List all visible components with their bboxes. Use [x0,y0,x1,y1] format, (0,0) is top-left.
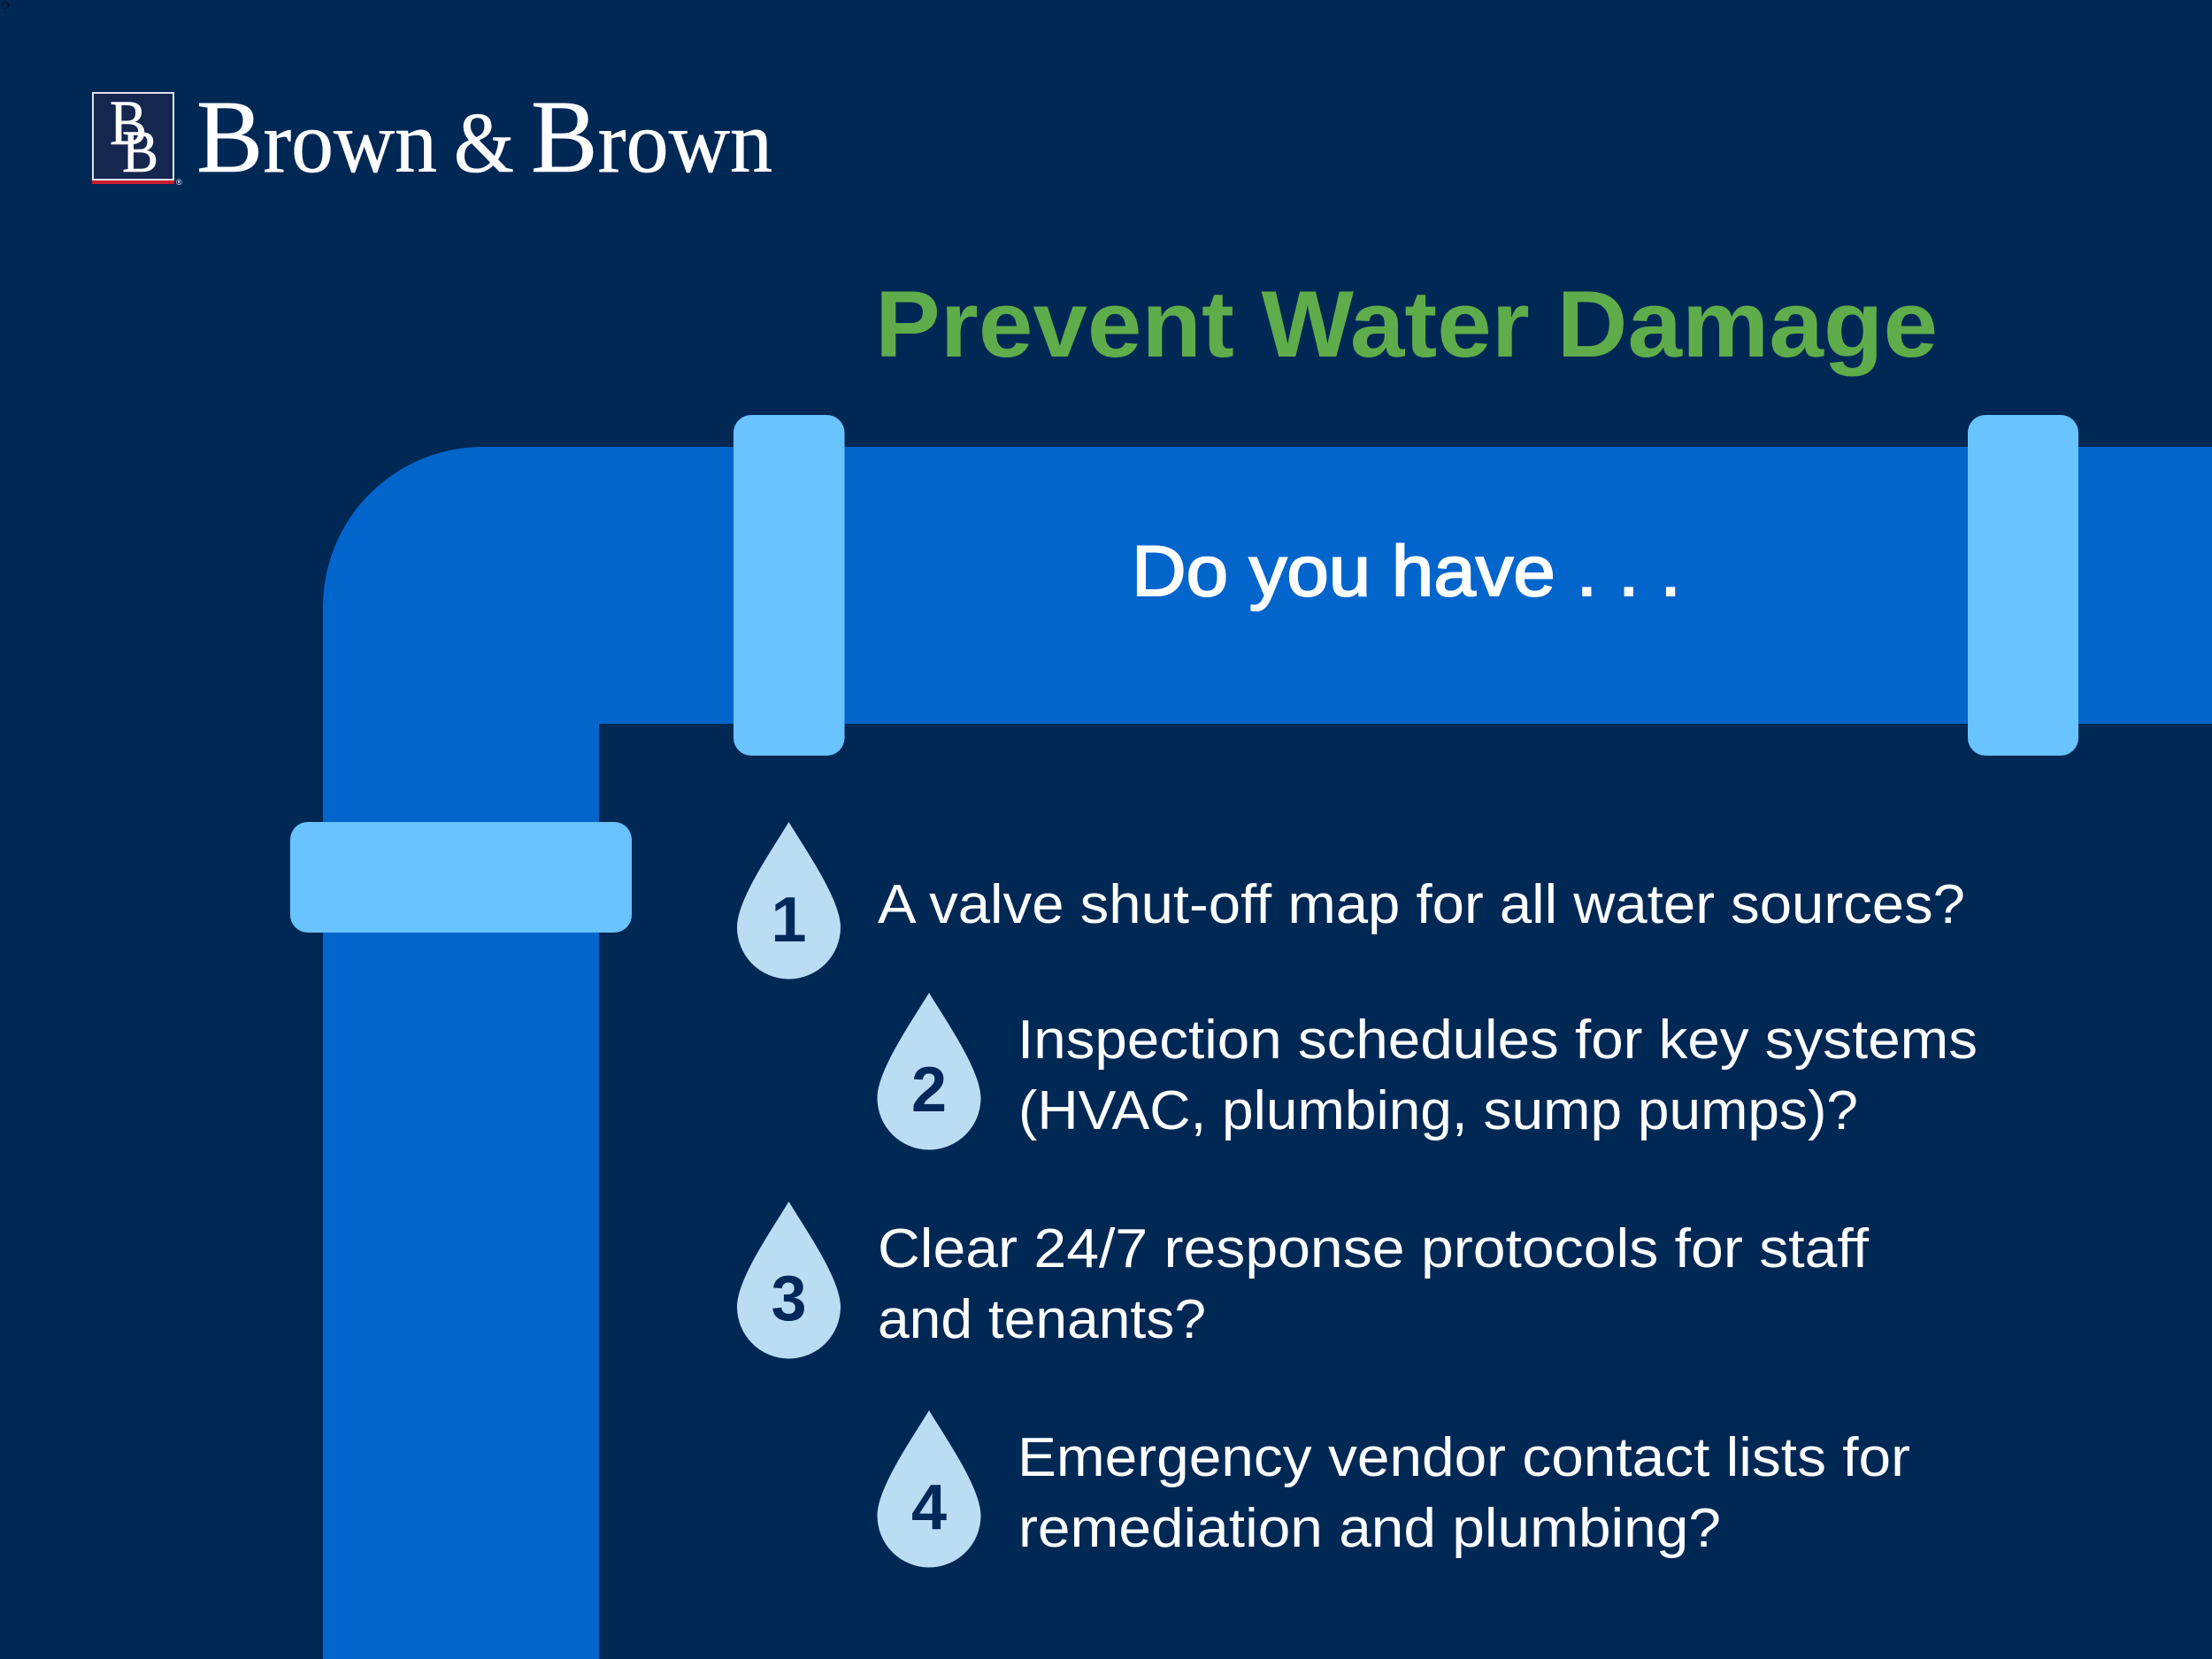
title: Prevent Water Damage [875,271,1938,377]
pipe clamp: top right [1968,415,2078,756]
logo wordmark: Brown [196,79,437,195]
logo wordmark: & [454,96,514,191]
item 4 text: remediation and plumbing? [1018,1498,1721,1559]
icon: water drop 4: 4 [911,1472,947,1543]
item 3 text: and tenants? [878,1289,1206,1350]
item 4 text [1018,1427,1910,1559]
item 2 text: (HVAC, plumbing, sump pumps)? [1018,1080,1858,1141]
item 3 text: Clear 24/7 response protocols for staff [878,1218,1870,1279]
icon: water drop 2 [878,993,980,1150]
pipe clamp: vertical section [290,822,632,933]
pipe clamp: top left [733,415,844,756]
icon: water drop 3 [737,1202,841,1359]
icon: water drop 1 [737,822,841,979]
item 3 text [878,1218,1870,1350]
logo emblem: B [110,88,147,158]
item 1 text: A valve shut-off map for all water sources? [878,874,1965,935]
icon: water drop 3: 3 [771,1263,807,1334]
icon: water drop 2: 2 [911,1055,947,1125]
logo emblem [92,88,182,187]
item 2 [878,993,1978,1150]
pipe elbow [323,447,2212,1659]
icon: water drop 4 [878,1410,980,1568]
item 2 text [1018,1010,1978,1141]
icon: water drop 1: 1 [771,885,807,956]
item 3 [737,1202,1870,1359]
pipe heading: Do you have . . . [1132,532,1681,611]
item 2 text: Inspection schedules for key systems [1018,1010,1978,1071]
logo wordmark: Brown [531,79,772,195]
logo emblem: B [122,118,158,185]
logo emblem: ® [176,178,182,187]
logo wordmark [196,79,772,195]
item 4 text: Emergency vendor contact lists for [1018,1427,1910,1488]
item 4 [878,1410,1910,1568]
item 1 [737,822,1965,979]
logo: Brown & Brown [92,79,772,195]
